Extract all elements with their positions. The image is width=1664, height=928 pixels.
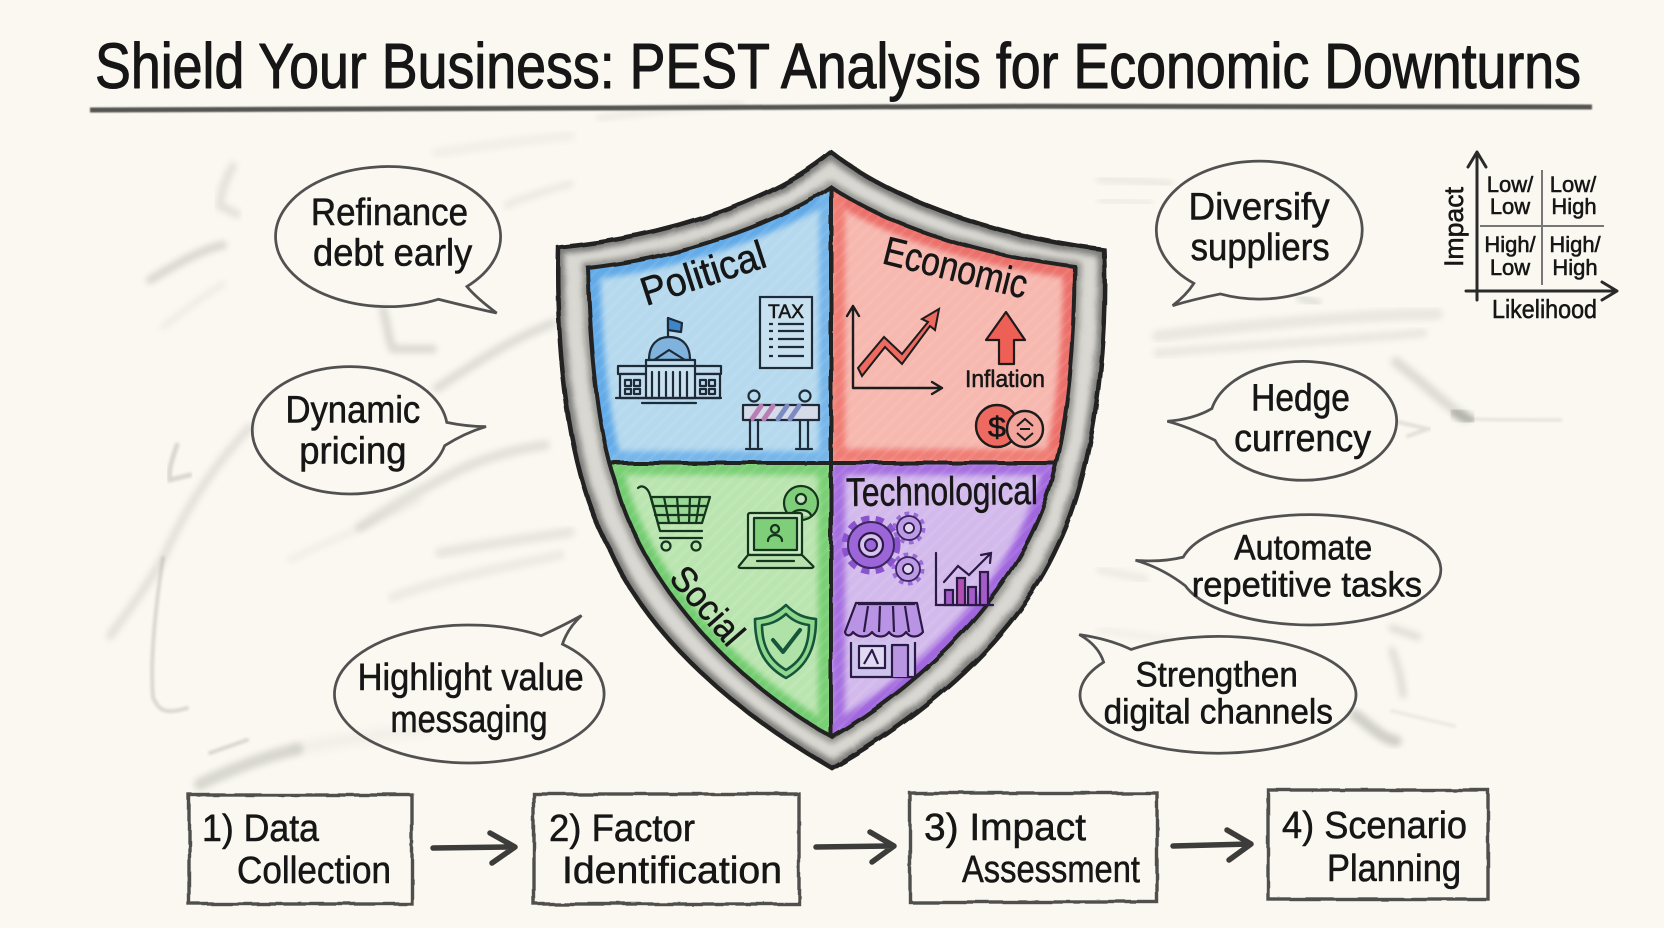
icon: bar chart [936,553,993,605]
quadrant fills [540,150,1121,773]
bubble: strengthen digital channels: digital channels [1104,693,1333,732]
process flow [189,790,1488,904]
matrix cell labels [1484,172,1602,280]
arrow 3 to 4 [1173,830,1251,860]
step 3 [910,793,1157,902]
label: Social: Social [662,557,753,654]
matrix cell labels: Low [1490,194,1530,219]
matrix cell labels: High [1552,255,1598,280]
step 1: 1) Data [202,808,320,850]
bubble: dynamic pricing: Dynamic [285,388,420,431]
bubble: hedge currency [1167,361,1397,480]
step 4: Planning [1327,848,1461,890]
background smudges [110,104,1561,784]
label: Economic: Economic [879,229,1032,307]
matrix grid [1480,170,1604,285]
bubble: diversify suppliers: Diversify [1189,186,1331,229]
icon: shield with check [755,605,816,678]
matrix cell labels: Low [1490,255,1530,280]
step 2: 2) Factor [549,808,695,850]
matrix cell labels: Low/ [1550,172,1597,197]
icon: road barrier [743,390,819,449]
step 4: 4) Scenario [1282,805,1467,847]
bubble: strengthen digital channels: Strengthen [1135,656,1298,695]
label: Technological: Technological [846,469,1038,515]
bubble: highlight value messaging: messaging [391,698,548,741]
icon: inflation up arrow [986,312,1025,364]
panel: PEST shield [540,150,1121,773]
bubble: hedge currency: Hedge [1251,377,1350,420]
icon: rising line chart [847,306,942,394]
icon: coins [976,405,1043,447]
matrix cell labels: Low/ [1487,172,1534,197]
icon: tax document: TAX [768,302,804,323]
icon: coins: $ [988,412,1006,444]
bubble: dynamic pricing: pricing [299,430,406,473]
icon: storefront [845,603,923,677]
matrix axis label: likelihood: Likelihood [1492,294,1597,324]
bubble: automate repetitive tasks: Automate [1234,528,1372,567]
risk matrix [1439,152,1617,324]
speech bubbles [252,161,1441,763]
bubble: hedge currency: currency [1234,417,1372,460]
shield frame [558,152,1105,768]
bubble: refinance debt early: Refinance [311,191,468,234]
bubble: dynamic pricing [252,367,486,494]
label: Political: Political [635,233,771,315]
step 2 [534,794,799,904]
icon: social profile circle [784,486,818,520]
matrix cell labels: High/ [1484,232,1537,257]
matrix cell labels: High [1551,194,1597,219]
bubble: highlight value messaging: Highlight value [358,656,584,699]
bubble: refinance debt early: debt early [313,231,473,274]
bubble: highlight value messaging [334,615,604,763]
bubble: strengthen digital channels [1079,635,1356,753]
matrix axis label: impact: Impact [1439,187,1469,267]
matrix cell labels: High/ [1549,232,1602,257]
step 1 [189,795,412,904]
icon: capitol building [616,318,721,403]
label: Inflation: Inflation [965,366,1045,393]
icon: gears [845,514,923,583]
icon: laptop [739,513,813,568]
arrow 1 to 2 [433,833,515,863]
step 4 [1268,790,1488,899]
bubble: refinance debt early [276,167,501,313]
bubble: automate repetitive tasks: repetitive tasks [1192,565,1422,604]
arrow 2 to 3 [816,832,894,862]
matrix axes [1466,152,1617,300]
step 1: Collection [237,850,391,892]
bubble: diversify suppliers: suppliers [1191,226,1330,269]
bubble: diversify suppliers [1156,161,1362,306]
step 3: Assessment [962,849,1140,891]
icon: shopping cart [638,486,710,550]
shield divider lines [588,187,1075,737]
step 3: 3) Impact [924,807,1086,849]
icon: tax document [760,297,812,368]
step 2: Identification [562,850,782,892]
bubble: automate repetitive tasks [1135,515,1441,625]
